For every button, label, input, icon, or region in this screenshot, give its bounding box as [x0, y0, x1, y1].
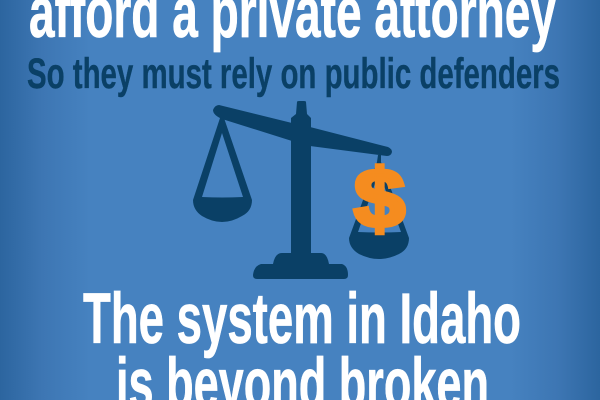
left pan: [193, 118, 252, 222]
dollar sign: $: [354, 152, 405, 245]
right pan: [349, 155, 409, 259]
icon: balance scale with dollar sign: [193, 101, 409, 279]
scale pillar and base: [253, 101, 348, 279]
scale beam: [213, 105, 392, 156]
